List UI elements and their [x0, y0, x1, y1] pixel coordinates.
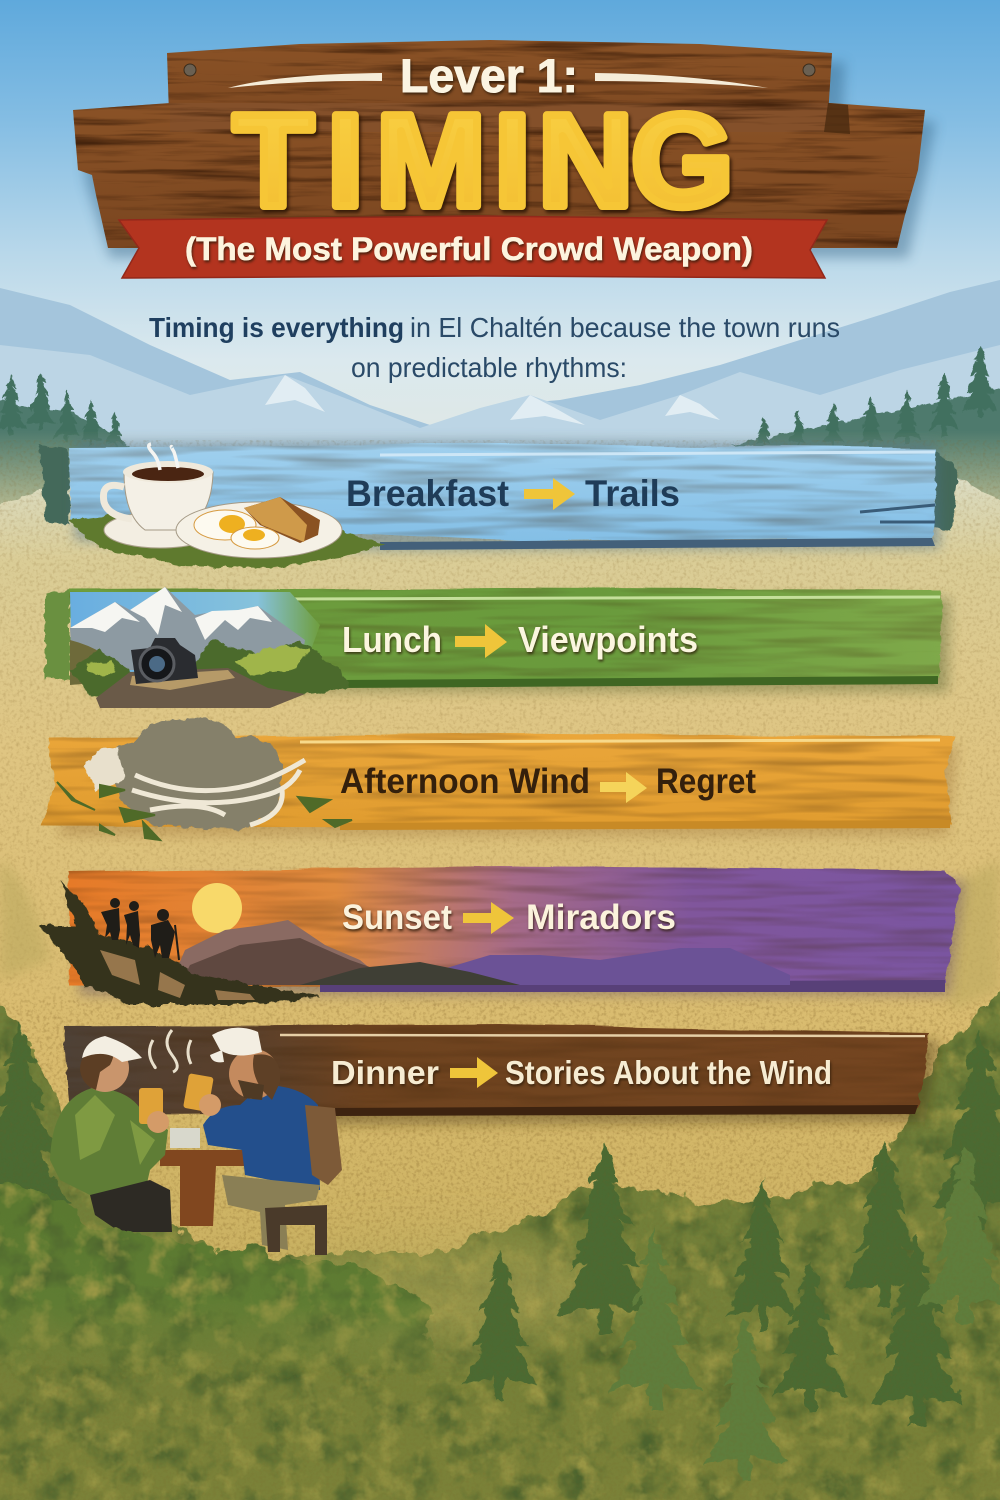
right mug	[183, 1073, 214, 1112]
heading: Lever 1: Lever 1:	[400, 49, 578, 102]
label: Sunset to Miradors	[342, 898, 676, 937]
decorative swooshes	[228, 73, 768, 88]
steam	[150, 1030, 191, 1072]
intro text	[149, 312, 840, 383]
icon: two hikers at table	[0, 1028, 440, 1380]
label: Dinner to Stories About the Wind	[331, 1054, 832, 1091]
right hiker	[183, 1028, 342, 1255]
red ribbon	[119, 216, 827, 278]
label: Sunset to Miradors: Sunset	[342, 898, 452, 937]
label: Lunch to Viewpoints: Lunch	[342, 619, 442, 660]
bushes	[0, 1180, 440, 1380]
icon: wind cloud	[57, 719, 352, 840]
arrow	[455, 624, 507, 658]
label: Afternoon Wind to Regret	[340, 762, 756, 803]
arrow	[463, 902, 514, 934]
foreground forest	[0, 990, 1000, 1500]
mid-page sandy ground	[0, 430, 1000, 1500]
intro text: in El Chaltén because the town runs	[410, 312, 840, 343]
subtitle: (The Most Powerful Crowd Weapon)	[185, 231, 753, 267]
hikers	[101, 898, 179, 960]
label: Lunch to Viewpoints	[342, 619, 698, 660]
wooden planks	[73, 40, 925, 248]
panel: dinner to stories	[0, 1024, 940, 1380]
label: Afternoon Wind to Regret: Regret	[656, 762, 756, 801]
mountains and far forest	[0, 280, 1000, 520]
label: Sunset to Miradors: Miradors	[526, 898, 676, 937]
icon: sunset hikers	[40, 880, 790, 1005]
arrow	[450, 1057, 498, 1088]
label: Afternoon Wind to Regret: Afternoon Wind	[340, 762, 590, 801]
panel: breakfast to trails	[68, 441, 940, 568]
intro text: Timing is everything	[149, 312, 404, 343]
label: Lunch to Viewpoints: Viewpoints	[518, 619, 698, 660]
panel: lunch to viewpoints	[45, 587, 950, 708]
label: Dinner to Stories About the Wind: Stories About the Wind	[505, 1054, 832, 1091]
left mug	[139, 1088, 163, 1124]
panel: sunset to miradors	[40, 866, 965, 1005]
label: Breakfast to Trails: Trails	[585, 473, 680, 514]
icon: breakfast	[70, 444, 385, 568]
board shadow	[85, 62, 936, 258]
label: Dinner to Stories About the Wind: Dinner	[331, 1054, 439, 1091]
intro text: on predictable rhythms:	[351, 352, 627, 383]
left hiker	[50, 1036, 172, 1232]
label: Breakfast to Trails: Breakfast	[346, 473, 509, 514]
table	[160, 1128, 263, 1226]
nails	[184, 64, 815, 76]
heading: TIMING: TIMING	[233, 87, 734, 234]
icon: mountains and camera	[70, 587, 350, 708]
label: Breakfast to Trails	[346, 473, 680, 514]
arrow	[524, 478, 575, 510]
title signboard	[73, 40, 936, 278]
panel: afternoon wind to regret	[40, 719, 958, 840]
arrow	[600, 772, 647, 803]
